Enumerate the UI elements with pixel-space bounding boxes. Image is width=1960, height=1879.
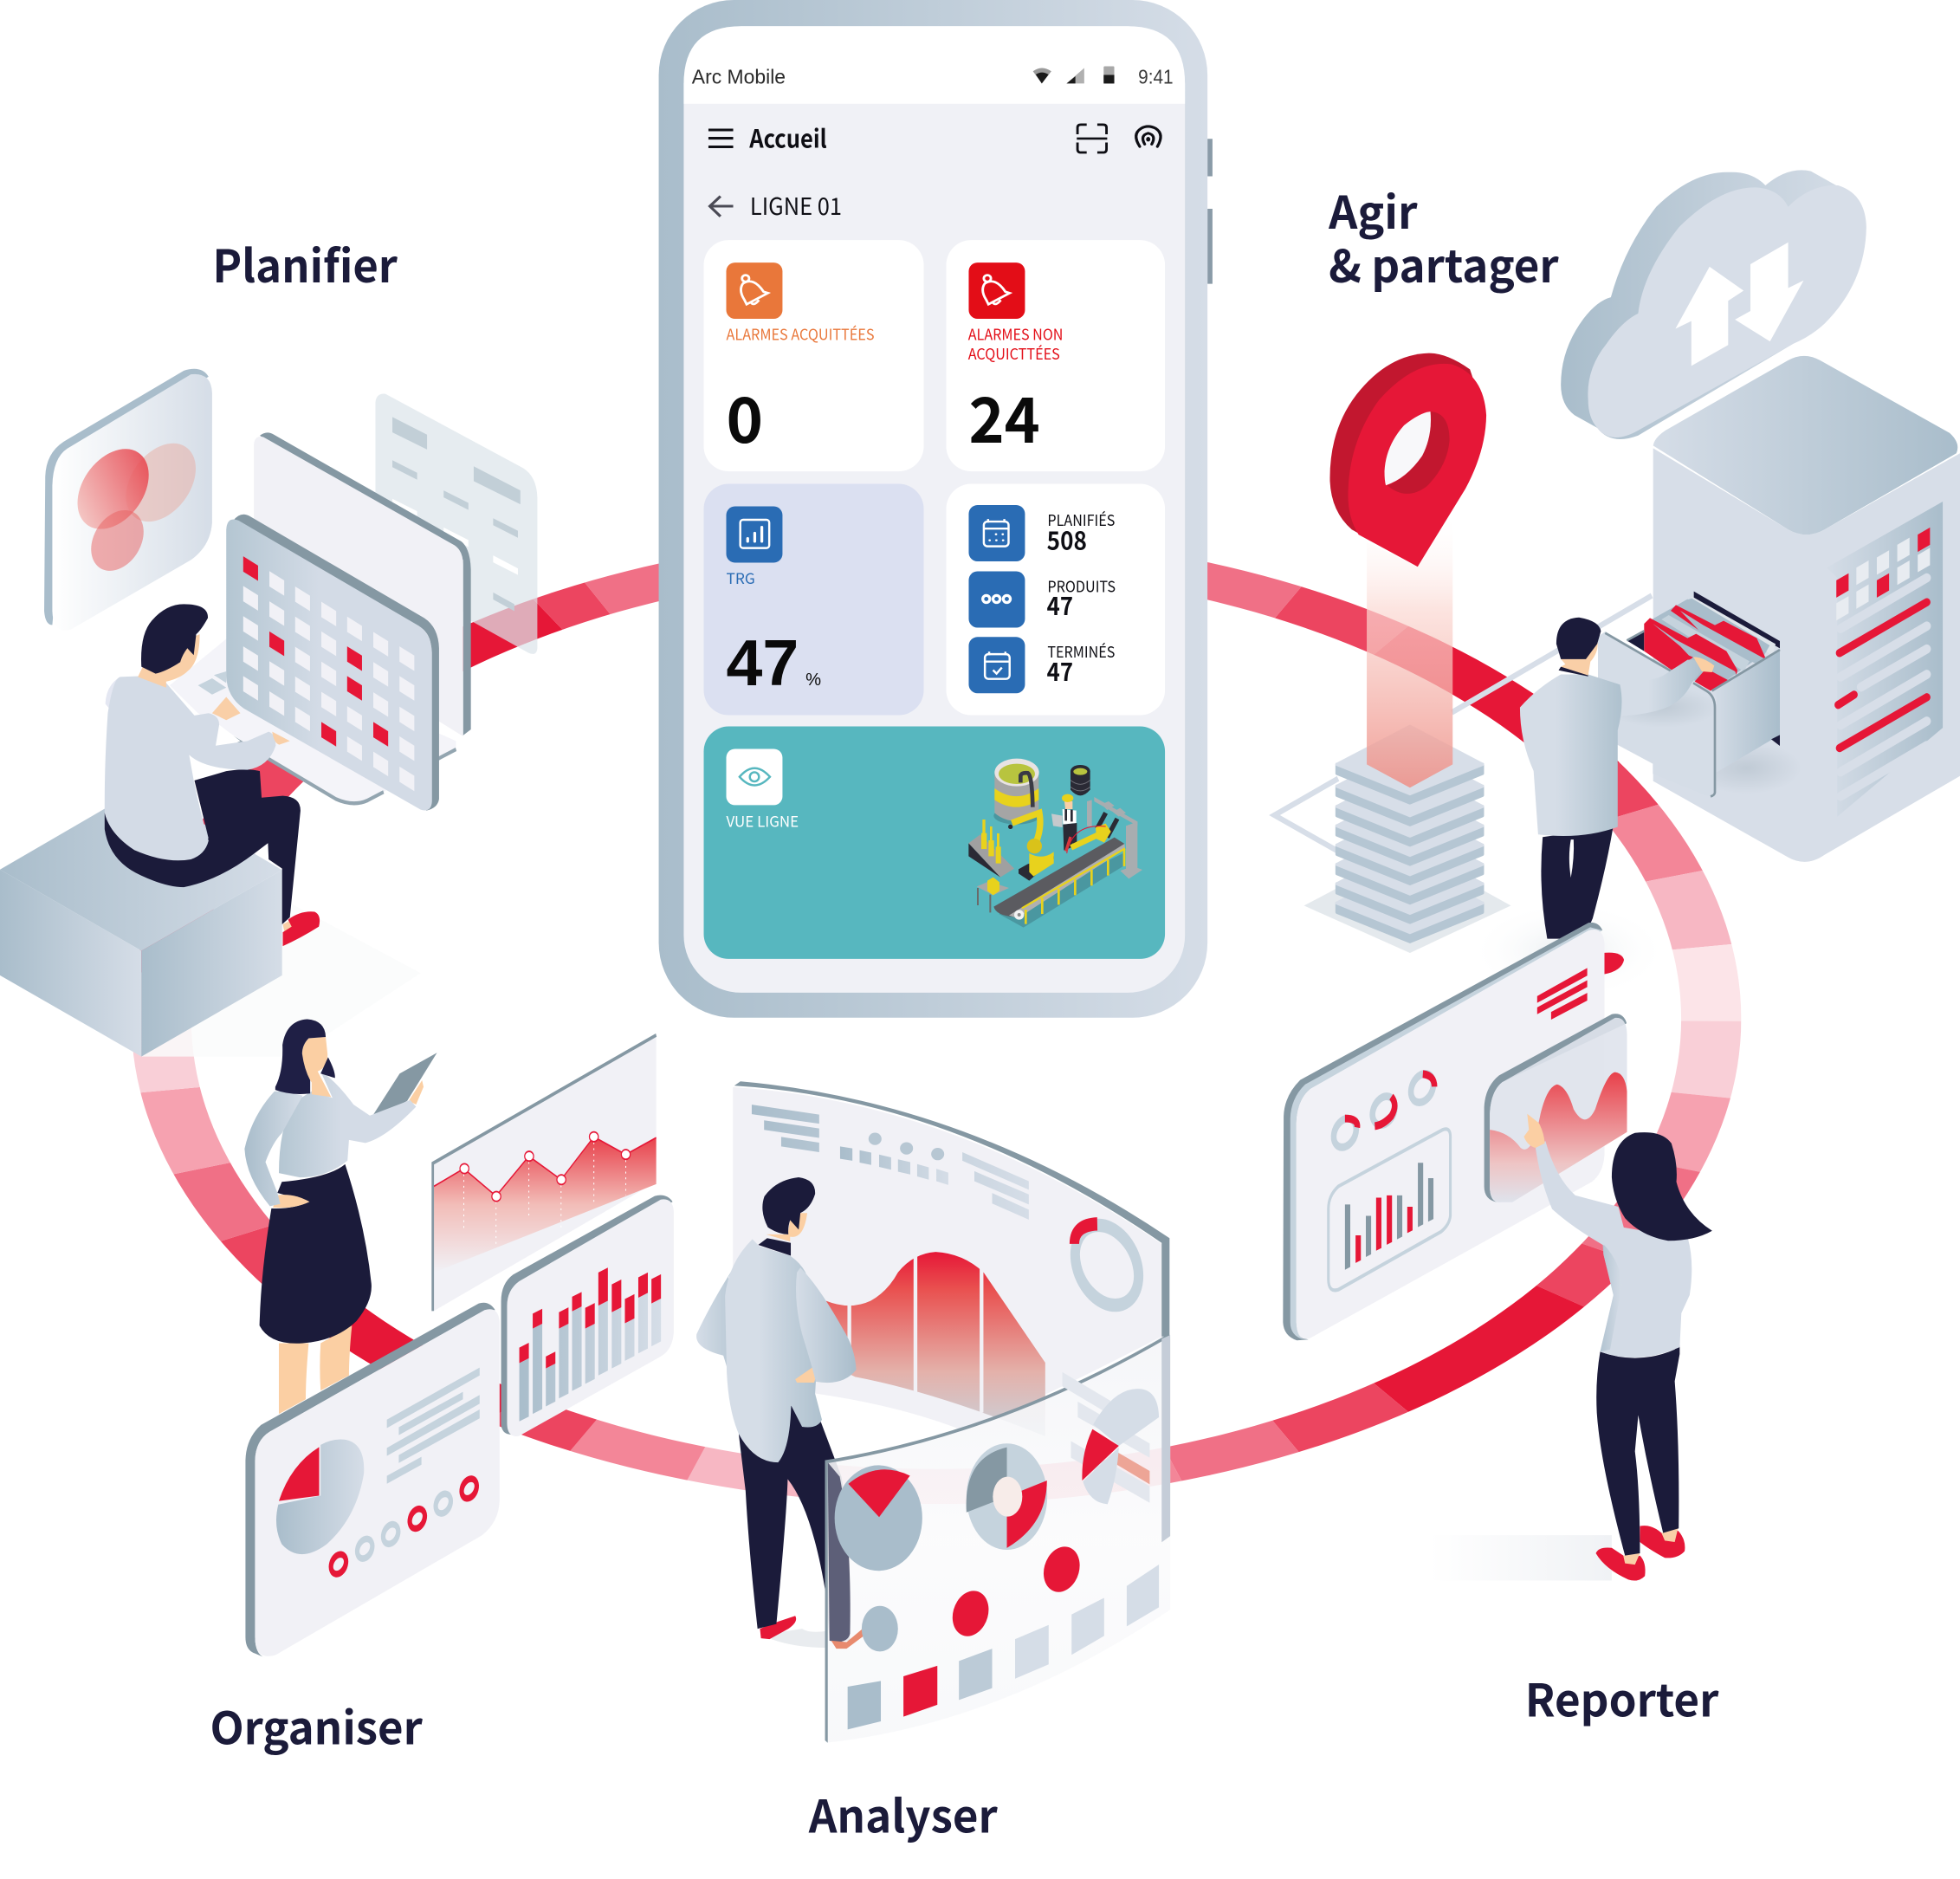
venn diagram card [44, 369, 212, 631]
tank [993, 759, 1040, 825]
seat cube [0, 787, 282, 1057]
phone mockup [659, 0, 1213, 1018]
card: alarmes acquittées: 0 [726, 370, 763, 461]
scan icon [1077, 125, 1107, 152]
open drawer with folders [1598, 592, 1802, 796]
icon: three circles [983, 595, 1011, 603]
card: TRG: TRG [726, 567, 755, 588]
woman touching chart [1429, 1114, 1712, 1581]
woman with tablet [244, 1020, 437, 1414]
barrel [1071, 765, 1090, 795]
card: vue ligne: VUE LIGNE [726, 810, 799, 832]
card: alarmes non acquittées: ALARMES NON [968, 323, 1063, 345]
heading: organiser: Organiser [210, 1692, 423, 1757]
seated man [105, 604, 320, 946]
floor shadow [141, 898, 421, 1057]
welding robot [1066, 824, 1111, 853]
wave chart panel [1485, 1014, 1627, 1202]
light beam [1367, 512, 1452, 787]
card: production counters: 508 [1047, 522, 1087, 557]
card: production counters: PRODUITS [1047, 574, 1116, 597]
status icons [1033, 67, 1115, 83]
screen title: Accueil [748, 120, 827, 155]
factory illustration [968, 759, 1142, 928]
calendar board [226, 515, 439, 811]
bell icon red [983, 275, 1010, 304]
app name: Arc Mobile [692, 65, 786, 87]
heading: agir et partager: Agir [1328, 177, 1418, 242]
worker [1051, 794, 1077, 851]
connector line [1274, 596, 1652, 852]
standing man [696, 1177, 857, 1648]
dashboard panel [1283, 923, 1604, 1340]
card: alarmes non acquittées: 24 [968, 370, 1040, 461]
phone side buttons [1207, 139, 1213, 284]
location pin [1329, 353, 1486, 567]
headings [210, 177, 1719, 1846]
card: alarmes non acquittées [947, 240, 1165, 471]
scene: planifier [0, 369, 537, 1057]
card: alarmes non acquittées: ACQUICTTÉES [968, 343, 1060, 365]
glass panel with charts [825, 1335, 1170, 1743]
card: alarmes acquittées: ALARMES ACQUITTÉES [726, 323, 875, 345]
heading: agir et partager [1328, 177, 1559, 295]
side table [977, 878, 1009, 912]
icon: eye [740, 768, 770, 786]
bottle ramp [968, 820, 1014, 878]
robot arm [1008, 813, 1054, 881]
soft floor shadow behind reporter panel [1469, 901, 1668, 1001]
icon: bar chart [741, 520, 769, 548]
heading: reporter: Reporter [1525, 1665, 1719, 1730]
card: alarmes acquittées [704, 240, 924, 471]
icon tiles [726, 262, 1025, 805]
red shoe behind panel [1601, 953, 1624, 975]
broadcast icon [1136, 126, 1161, 146]
curved dashboard panel [733, 1081, 1169, 1436]
scene: organiser [244, 1020, 674, 1658]
card: production counters: 47 [1047, 653, 1073, 689]
phone body [659, 0, 1207, 1018]
scene: agir et partager, man and marker [1304, 353, 1621, 953]
icon: calendar planned [984, 519, 1008, 547]
status bar [683, 26, 1185, 104]
card: production counters [947, 484, 1165, 716]
pie chart panel [245, 1303, 500, 1658]
card: TRG: 47 [726, 626, 799, 699]
scene: reporter [1283, 923, 1712, 1581]
card: TRG [704, 484, 924, 716]
desk with keyboard [170, 638, 456, 804]
line title: LIGNE 01 [750, 187, 842, 222]
cloud with arrows [1561, 170, 1866, 439]
screen [683, 26, 1185, 993]
stacked data layers [1304, 726, 1510, 953]
translucent table panel [375, 394, 537, 654]
bell icon orange [741, 275, 768, 304]
icon: calendar done [985, 651, 1010, 679]
card: vue ligne [704, 726, 1165, 959]
card: production counters: 47 [1047, 587, 1073, 623]
server cabinet [1653, 356, 1960, 862]
heading: agir et partager: & partager [1329, 230, 1559, 295]
lower phone icons [740, 519, 1011, 786]
gantry [1087, 797, 1142, 878]
conveyor belt [993, 838, 1125, 928]
clock: 9:41 [1138, 65, 1174, 87]
standing man at drawer [1520, 618, 1621, 939]
heading: analyser: Analyser [808, 1781, 998, 1846]
card: production counters: TERMINÉS [1047, 640, 1115, 663]
card: TRG: % [805, 671, 821, 690]
middle white panel [254, 432, 471, 736]
card: production counters: PLANIFIÉS [1047, 509, 1115, 531]
scene: agir et partager, cloud and server [1274, 170, 1960, 862]
stacked bars panel [501, 1195, 674, 1436]
scene: analyser [696, 1081, 1170, 1743]
line chart panel [431, 1033, 657, 1312]
heading: planifier: Planifier [212, 230, 398, 295]
phone toolbar and card icons [708, 67, 1161, 304]
back arrow [710, 197, 734, 217]
hamburger menu icon [708, 128, 734, 148]
process ring [133, 562, 1741, 1499]
